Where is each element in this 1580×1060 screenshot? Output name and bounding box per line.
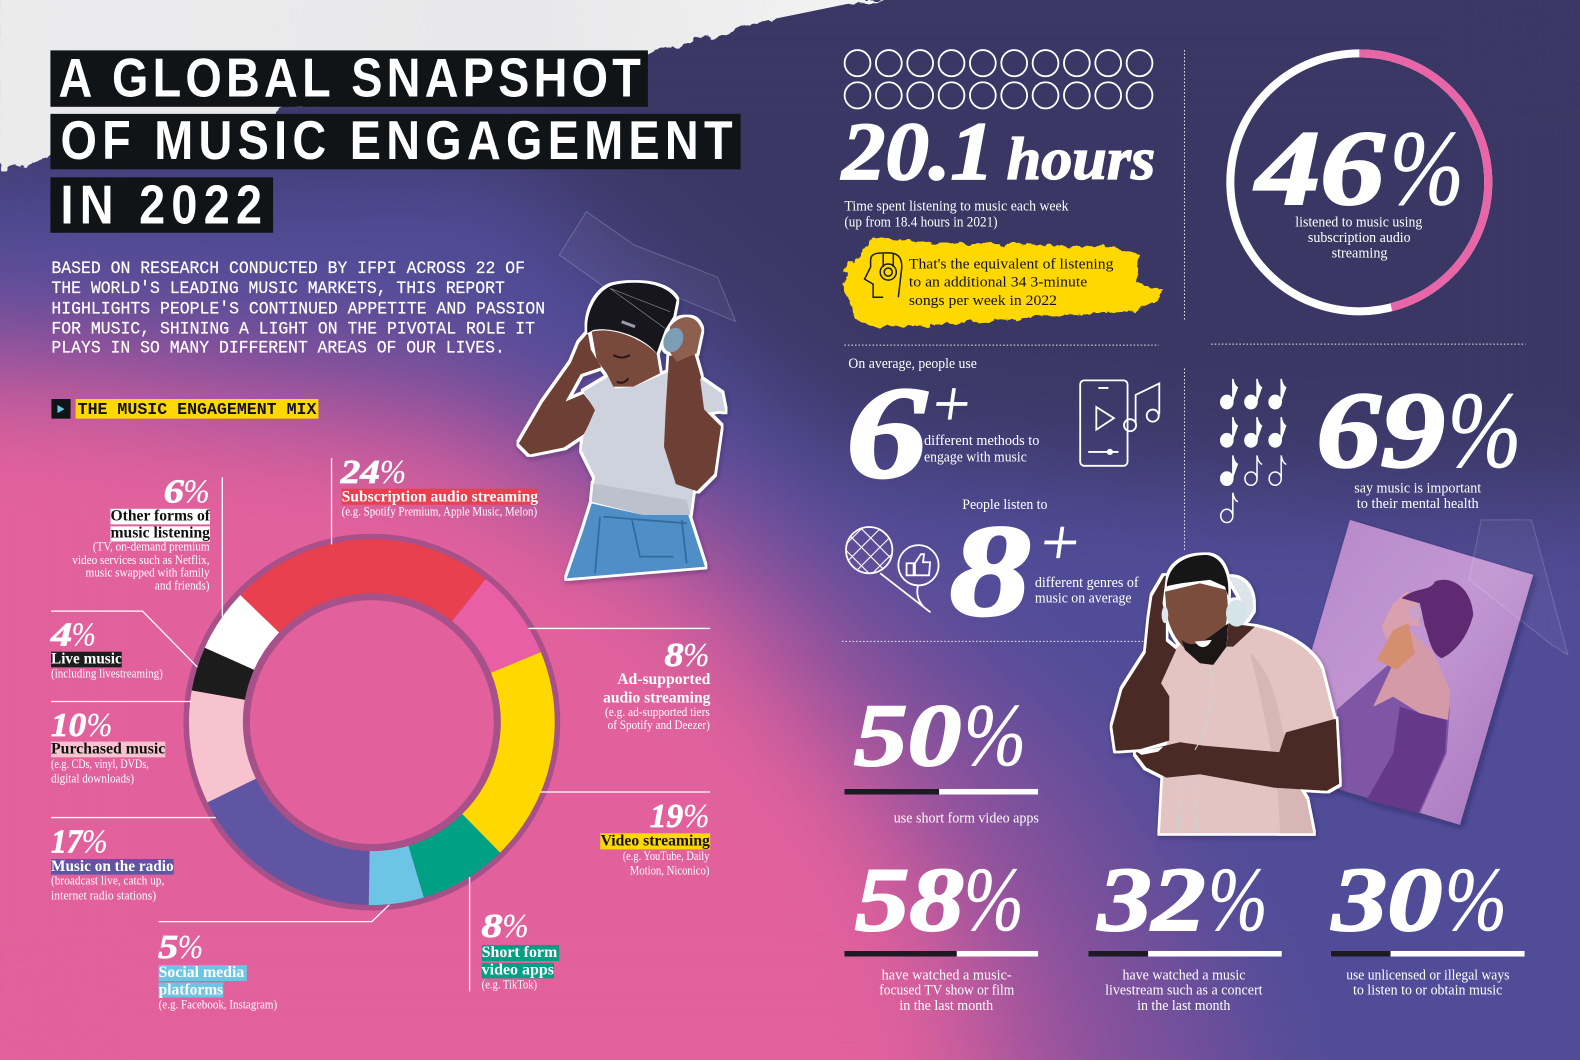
label: music on the radio: % [82, 822, 108, 860]
segment: ad-supported audio streaming [452, 579, 541, 673]
stat: 8+ genres: 8 [950, 499, 1031, 644]
photo: man with headphones [1113, 555, 1338, 833]
label: music on the radio: 17 [51, 822, 84, 860]
stat: 69%: % [1447, 370, 1522, 491]
label: other forms: video services such as Netflix, [72, 553, 210, 567]
label: music on the radio: (broadcast live, catch up, [51, 874, 164, 888]
stat: 69%: say music is important [1354, 481, 1482, 497]
label: other forms: % [183, 472, 210, 510]
label: video streaming: Motion, Niconico) [630, 864, 709, 878]
title [50, 47, 741, 235]
label: social media platforms: platforms [159, 982, 223, 999]
label: short form video apps [481, 907, 559, 991]
icon: grid of music notes [1221, 379, 1286, 523]
stat: 32% livestream: 32 [1097, 849, 1206, 950]
label: music on the radio: internet radio stations) [51, 889, 156, 903]
label: video streaming [600, 797, 710, 878]
stat: 30% unlicensed: use unlicensed or illegal ways [1346, 967, 1510, 983]
label: ad-supported audio streaming: Ad-supported [617, 671, 710, 688]
callout: yellow brush: That's the equivalent of listening [909, 257, 1114, 273]
label: other forms: music listening [110, 525, 210, 542]
stat: 58% music TV: in the last month [899, 998, 994, 1014]
callout: yellow brush: songs per week in 2022 [909, 293, 1057, 309]
segment: social media platforms [369, 846, 424, 905]
label: music on the radio: Music on the radio [51, 858, 174, 875]
label: ad-supported audio streaming: (e.g. ad-supported tiers [605, 705, 710, 719]
leader lines [51, 458, 710, 991]
label: purchased music: digital downloads) [51, 772, 134, 786]
label: ad-supported audio streaming: % [683, 636, 709, 674]
stat: 46% ring: listened to music using [1295, 215, 1423, 231]
stat: 32% livestream: livestream such as a concert [1105, 983, 1263, 999]
label: short form video apps: % [502, 907, 529, 945]
label: other forms: Other forms of [110, 508, 211, 525]
intro text: PLAYS IN SO MANY DIFFERENT AREAS OF OUR LIVES. [51, 340, 505, 359]
intro text [51, 260, 545, 359]
stat: 69%: to their mental health [1357, 496, 1479, 512]
icon: microphone and thumbs up [846, 527, 939, 612]
label: social media platforms: (e.g. Facebook, Instagram) [159, 998, 277, 1012]
stat: 58% music TV: % [964, 849, 1024, 950]
label: short form video apps: 8 [481, 907, 503, 945]
stat: 50% short form video: % [964, 687, 1026, 785]
stat: 6+ methods: + [924, 368, 979, 441]
intro text: FOR MUSIC, SHINING A LIGHT ON THE PIVOTAL ROLE IT [51, 321, 535, 340]
stat: 46% ring: 46 [1254, 110, 1385, 228]
stat: 30% unlicensed: % [1445, 849, 1507, 950]
segment: live music [192, 648, 254, 700]
icon: head with headphones [865, 253, 902, 297]
segment: subscription audio streaming [240, 539, 486, 633]
label: live music: % [72, 616, 96, 654]
stat: 6+ methods: different methods to [924, 433, 1039, 449]
stat: 30% unlicensed: to listen to or obtain music [1353, 983, 1503, 999]
callout: yellow brush: to an additional 34 3-minute [909, 275, 1088, 291]
donut chart [183, 534, 560, 911]
label: video streaming: Video streaming [601, 832, 710, 849]
label: purchased music [51, 706, 165, 786]
stat: 58% music TV: have watched a music- [882, 967, 1012, 983]
label: short form video apps: Short form [482, 944, 558, 961]
label: purchased music: Purchased music [51, 741, 165, 758]
segment: short form video apps [408, 814, 500, 897]
label: live music: 4 [50, 616, 72, 654]
segment: video streaming [462, 652, 555, 853]
stat: 20.1 hours: Time spent listening to music each week [844, 198, 1069, 214]
stat: 32% livestream: in the last month [1137, 998, 1231, 1014]
torn paper [0, 0, 887, 171]
stat: 58% music TV: focused TV show or film [879, 983, 1014, 999]
segment: purchased music [189, 690, 256, 802]
stat: 8+ genres: + [1032, 506, 1087, 579]
stat: 6+ methods: On average, people use [848, 356, 977, 372]
intro text: THE WORLD'S LEADING MUSIC MARKETS, THIS REPORT [51, 280, 505, 299]
label: live music: Live music [51, 651, 122, 668]
label: ad-supported audio streaming: audio streaming [603, 689, 710, 706]
label: other forms: and friends) [155, 578, 210, 592]
label: other forms: music swapped with family [85, 566, 210, 580]
stat: 50% short form video: use short form video apps [894, 811, 1039, 827]
label: ad-supported audio streaming: of Spotify and Deezer) [608, 718, 710, 732]
stat: 6+ methods [846, 356, 1039, 506]
segment: music on the radio [207, 779, 370, 905]
label: short form video apps: video apps [482, 962, 554, 979]
stat: 69% [1316, 370, 1522, 512]
photo: woman in purple [1277, 520, 1533, 825]
tape over photo [1469, 520, 1568, 655]
stat: 50% short form video: 50 [854, 687, 961, 785]
label: social media platforms: Social media [159, 964, 244, 981]
label: video streaming: 19 [650, 797, 683, 835]
label: ad-supported audio streaming: 8 [664, 636, 684, 674]
segment: other forms of listening [205, 595, 279, 670]
label: social media platforms: 5 [158, 928, 178, 966]
intro text: BASED ON RESEARCH CONDUCTED BY IFPI ACROSS 22 OF [51, 260, 525, 279]
label: subscription audio streaming: % [380, 453, 406, 491]
label: live music: (including livestreaming) [51, 666, 163, 680]
stat: 8+ genres: different genres of [1035, 575, 1140, 591]
stat: 30% unlicensed: 30 [1331, 849, 1442, 950]
label: other forms: (TV, on-demand premium [93, 539, 210, 553]
stat: 8+ genres: People listen to [962, 497, 1047, 513]
label: social media platforms: % [178, 928, 203, 966]
label: ad-supported audio streaming [603, 636, 710, 732]
stat: 32% livestream: % [1208, 849, 1268, 950]
label: short form video apps: (e.g. TikTok) [482, 977, 537, 991]
stat: 50% short form video [844, 687, 1039, 827]
label: purchased music: % [87, 706, 112, 744]
section heading: THE MUSIC ENGAGEMENT MIX [78, 400, 316, 419]
stat: 30% unlicensed [1331, 849, 1525, 999]
label: other forms [72, 472, 211, 592]
title: OF MUSIC ENGAGEMENT [60, 110, 733, 171]
stat: 8+ genres [950, 497, 1140, 644]
stat: 46% ring: streaming [1332, 246, 1388, 262]
label: subscription audio streaming: 24 [339, 453, 380, 491]
label: social media platforms [158, 928, 277, 1012]
photo: woman with beanie [520, 283, 725, 578]
label: subscription audio streaming: Subscription audio streaming [342, 488, 538, 505]
stat: 46% ring: subscription audio [1308, 230, 1411, 246]
stat: 20.1 hours: 20.1 [840, 105, 994, 197]
stat: 6+ methods: engage with music [924, 449, 1027, 465]
stat: 20.1 hours [840, 105, 1155, 231]
icon: phone and music note [1080, 380, 1159, 466]
stat: 46% ring: % [1390, 110, 1464, 228]
label: music on the radio [51, 822, 174, 903]
stat: 20.1 hours: (up from 18.4 hours in 2021) [844, 215, 998, 231]
tape over woman [559, 212, 736, 321]
callout: yellow brush [845, 238, 1163, 327]
stat: 69%: 69 [1316, 370, 1445, 491]
stat: 58% music TV: 58 [855, 849, 964, 950]
stat: 46% ring [1230, 53, 1488, 311]
title: A GLOBAL SNAPSHOT [58, 47, 641, 109]
label: purchased music: 10 [51, 706, 86, 744]
stat: 20.1 hours: hours [1007, 126, 1155, 193]
label: purchased music: (e.g. CDs, vinyl, DVDs, [51, 757, 149, 771]
label: video streaming: % [683, 797, 709, 835]
label: live music [50, 616, 163, 680]
stat: 8+ genres: music on average [1035, 591, 1132, 607]
hours circles [845, 50, 1152, 108]
intro text: HIGHLIGHTS PEOPLE'S CONTINUED APPETITE AND PASSION [51, 300, 545, 319]
title: IN 2022 [60, 174, 262, 235]
label: subscription audio streaming: (e.g. Spotify Premium, Apple Music, Melon) [342, 504, 537, 518]
label: other forms: 6 [164, 472, 185, 510]
stat: 32% livestream: have watched a music [1123, 967, 1246, 983]
stat: 32% livestream [1088, 849, 1282, 1014]
stat: 58% music TV [844, 849, 1038, 1014]
label: video streaming: (e.g. YouTube, Daily [623, 849, 709, 863]
stat: 6+ methods: 6 [846, 361, 928, 506]
label: subscription audio streaming [339, 453, 538, 518]
